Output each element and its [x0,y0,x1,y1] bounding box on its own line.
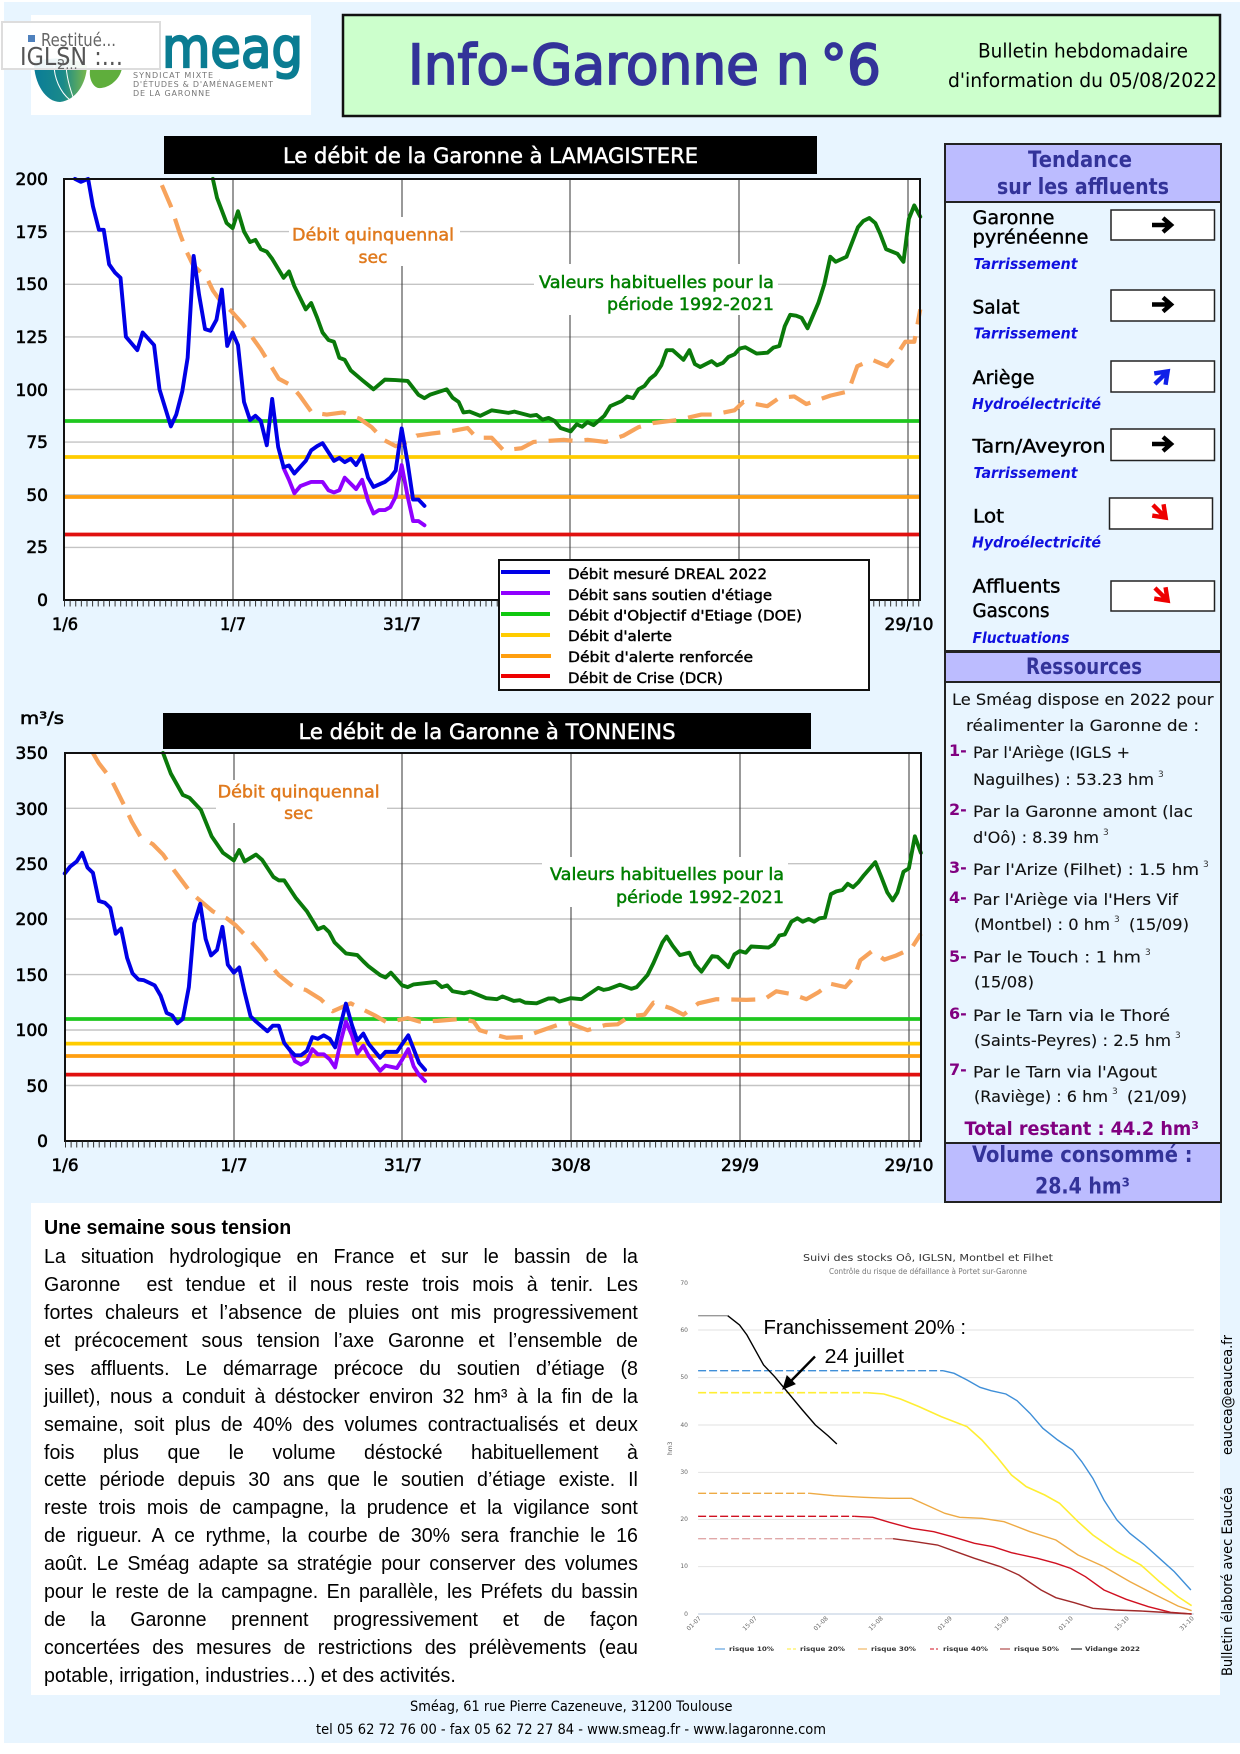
article text: ses affluents. Le démarrage précoce du soutien d’étiage (8 [44,1358,638,1380]
chart legend: risque 40% [943,1646,988,1653]
item 1: Naguilhes) : 53.23 hm [973,770,1154,789]
article text [44,1216,638,1687]
article text: de rigueur. A ce rythme, la courbe de 30% sera franchie le 16 [44,1525,638,1547]
annotation: habitual values: période 1992-2021 [607,295,774,315]
icon: arrow down-right [1147,499,1171,523]
item 5 [949,947,1151,992]
intro text: réalimenter la Garonne de : [966,716,1199,735]
y axis labels: 150 [16,966,48,986]
logo subtitle [133,71,273,98]
y axis labels: 25 [26,538,48,558]
article text: potable, irrigation, industries…) et des activités. [44,1665,456,1687]
risk 10% curve [698,1371,1191,1590]
callout: threshold crossing [764,1317,966,1389]
bulletin date [948,40,1217,92]
chart subtitle: Contrôle du risque de défaillance à Portet sur-Garonne [829,1267,1027,1276]
panel: tendance sur les affluents [945,144,1221,651]
row: Garonne pyrénéenne [972,207,1214,273]
row: Lot: Hydroélectricité [972,534,1101,552]
volume consommé: Volume consommé : [972,1143,1192,1168]
row: Tarn/Aveyron: Tarn/Aveyron [971,436,1106,458]
chart title: Lamagistere [164,136,817,174]
annotation: quinquennal [218,782,380,824]
article text: cette période depuis 30 ans que le soutien d’étiage existe. Il [44,1469,638,1491]
total restant: Total restant : 44.2 hm³ [964,1118,1199,1140]
item 2 [949,800,1193,847]
item 6: 3 [1175,1031,1181,1041]
y axis labels: 200 [16,170,48,190]
item 7: 7- [949,1060,967,1079]
article text: reste trois mois de campagne, la prudence et la vigilance sont [44,1497,638,1519]
item 5: 3 [1145,948,1151,958]
logo subtitle: D'ÉTUDES & D'AMÉNAGEMENT [133,78,273,89]
item 6: Par le Tarn via le Thoré [973,1006,1170,1025]
chart legend [715,1646,1140,1653]
x axis labels: 01-10 [1057,1615,1075,1632]
y axis labels: 350 [16,744,48,764]
x axis labels: 15-07 [741,1615,759,1632]
x axis labels: 1/6 [52,1156,78,1176]
series curves [65,753,921,1081]
y axis labels: 75 [26,433,48,453]
ressources heading: Ressources [1026,655,1142,680]
row: Tarn/Aveyron [971,429,1214,482]
x axis labels: 29/9 [721,1156,759,1176]
icon: teal leaf blob [34,59,87,102]
callout: threshold crossing: 24 juillet [824,1346,904,1368]
chart legend: risque 50% [1014,1646,1059,1653]
panel heading: Tendance [1028,148,1132,173]
row: Affluents Gascons [972,576,1214,647]
x axis labels: 31-10 [1178,1615,1196,1632]
y axis labels: 50 [680,1374,688,1381]
callout: threshold crossing: Franchissement 20% : [764,1317,966,1339]
annotation: habitual values: Valeurs habituelles pour la [539,273,774,293]
side credit text: Bulletin élaboré avec Eaucéa [1220,1487,1236,1676]
item 4: (15/09) [1129,915,1189,934]
item 2: d'Oô) : 8.39 hm [973,828,1099,847]
x axis labels: 15-10 [1113,1615,1131,1632]
chart title: Suivi des stocks Oô, IGLSN, Montbel et Filhet [803,1252,1053,1264]
y axis labels: 10 [680,1563,688,1570]
chart title: Tonneins: Le débit de la Garonne à TONNEINS [298,720,676,744]
x axis labels: 15-08 [867,1615,885,1632]
y axis labels [16,170,48,611]
x axis labels: 15-09 [993,1615,1011,1632]
panel heading [945,144,1221,202]
y axis labels: 50 [26,1077,48,1097]
article text: juillet), nous a conduit à déstocker environ 32 hm³ à la fin de la [44,1386,638,1408]
row: Affluents Gascons: Gascons [972,600,1050,622]
chart legend: risque 30% [871,1646,916,1653]
y axis labels: 30 [680,1469,688,1476]
item 7: Par le Tarn via l'Agout [973,1062,1157,1082]
habitual values curve [213,179,920,431]
chart legend: Débit mesuré DREAL 2022 [568,567,767,583]
label backgrounds [289,217,778,315]
logo wordmark: meag [162,16,303,80]
item 7 [949,1060,1187,1106]
x axis labels: 1/6 [52,615,78,635]
annotation: quinquennal: Débit quinquennal [218,782,380,802]
article text: Garonne est tendue et il nous reste trois mois à tenir. Les [44,1274,638,1296]
panel: article [31,1203,1220,1695]
item 6: 6- [949,1004,967,1023]
series curves [75,179,920,525]
y axis labels: 250 [16,855,48,875]
item 7: (21/09) [1127,1087,1187,1106]
item 3: 3 [1203,860,1209,870]
plot [698,1316,1194,1614]
item 4: 4- [949,888,967,907]
bulletin date: d'information du 05/08/2022 [948,69,1217,92]
threshold lines [65,1019,921,1075]
icon: green leaf blob [90,68,122,88]
risk 50% curve [698,1539,1192,1614]
volume consommé [945,1143,1221,1202]
y axis labels: 0 [684,1611,688,1618]
item 1 [949,741,1164,789]
chart legend: risque 10% [729,1646,774,1653]
chart title: Tonneins [163,713,811,749]
chart legend: Vidange 2022 [1085,1646,1140,1653]
row: Lot: Lot [973,506,1004,528]
article text: de la Garonne prennent progressivement et de façon [44,1609,638,1631]
annotation: habitual values [550,865,784,908]
y axis title: hm3 [667,1441,674,1455]
footer address: Sméag, 61 rue Pierre Cazeneuve, 31200 Toulouse [410,1699,732,1715]
row: Garonne pyrénéenne: Tarrissement [974,255,1078,273]
article text: semaine, soit plus de 40% des volumes contractualisés et deux [44,1414,638,1436]
x axis labels: 1/7 [220,615,246,635]
item 2: Par la Garonne amont (lac [973,802,1193,821]
chart legend: Débit d'Objectif d'Etiage (DOE) [568,608,802,624]
2022 drawdown curve [698,1316,837,1444]
icon: arrow up-right [1149,366,1173,390]
article text: fortes chaleurs et l’absence de pluies ont mis progressivement [44,1302,638,1324]
item 2: 2- [949,800,967,819]
item 1: Par l'Ariège (IGLS + [973,743,1130,762]
chart: Tonneins [16,744,934,1176]
side credit text [1220,1335,1236,1676]
article text: fois plus que le volume déstocké habituellement à [44,1442,638,1464]
item 6 [949,1004,1181,1050]
volume consommé: 28.4 hm³ [1035,1174,1130,1200]
x axis labels: 31/7 [384,1156,422,1176]
label backgrounds [216,780,788,907]
bulletin date: Bulletin hebdomadaire [978,40,1188,62]
icon: arrow right [1152,218,1171,232]
chart: Lamagistere [16,170,934,635]
quinquennal dry flow curve [93,753,921,1038]
chart legend: Débit d'alerte [568,629,672,645]
overlay label box: 2... [57,58,78,73]
panel heading: sur les affluents [997,175,1169,200]
y axis labels: 175 [16,223,48,243]
item 4: 3 [1114,915,1120,925]
logo subtitle: DE LA GARONNE [133,89,210,98]
y axis labels: 0 [37,591,48,611]
logo with overlay label [2,15,311,115]
overlay label box: Restitué... [41,30,116,51]
x axis labels: 01-09 [936,1615,954,1632]
x axis labels: 01-08 [812,1615,830,1632]
risk 20% curve [698,1393,1192,1606]
item 3: 3- [949,858,967,877]
x axis labels: 31/7 [383,615,421,635]
y axis labels: 150 [16,275,48,295]
y axis labels: 100 [16,381,48,401]
row: Affluents Gascons: Affluents [972,576,1060,598]
intro text [952,690,1214,735]
ressources heading [945,652,1221,682]
y axis labels: 50 [26,486,48,506]
article text: août. Le Sméag adapte sa stratégie pour conserver des volumes [44,1553,638,1575]
habitual values curve [163,753,921,1003]
y axis labels: 100 [16,1021,48,1041]
row: Ariège: Hydroélectricité [972,395,1101,413]
y axis labels: 125 [16,328,48,348]
row: Ariège [972,361,1214,413]
chart: stock follow-up [667,1252,1196,1653]
footer address: tel 05 62 72 76 00 - fax 05 62 72 27 84 - www.smeag.fr - www.lagaronne.com [316,1722,826,1738]
y axis labels: 300 [16,800,48,820]
item 5: (15/08) [974,972,1034,992]
x axis labels: 30/8 [551,1156,591,1176]
chart legend: Débit sans soutien d'étiage [568,588,772,604]
y axis labels [680,1280,688,1618]
x axis labels: 29/10 [884,615,934,635]
item 7: 3 [1112,1087,1118,1097]
header banner [343,15,1220,116]
logo subtitle: SYNDICAT MIXTE [133,71,213,80]
chart legend: Débit d'alerte renforcée [568,650,753,666]
annotation: quinquennal: Débit quinquennal [292,226,454,246]
article text: La situation hydrologique en France et sur le bassin de la [44,1246,638,1268]
threshold lines [64,421,920,534]
title: Info-Garonne n °6 [408,33,881,97]
x axis labels: 29/10 [884,1156,934,1176]
item 5: 5- [949,947,967,966]
chart legend [499,560,869,690]
item 6: (Saints-Peyres) : 2.5 hm [974,1031,1171,1050]
icon: arrow right [1152,437,1171,451]
x axis labels: 1/7 [220,1156,248,1176]
annotation: habitual values: période 1992-2021 [616,888,784,908]
icon: arrow right [1152,298,1171,312]
measured flow curve [65,853,425,1070]
measured flow curve [75,179,424,506]
row: Ariège: Ariège [972,367,1034,389]
quinquennal dry flow curve [162,185,920,450]
annotation: habitual values: Valeurs habituelles pour la [550,865,784,885]
item 2: 3 [1103,828,1109,838]
y axis labels: 0 [37,1132,48,1152]
x axis labels [685,1615,1196,1632]
item 7: (Raviège) : 6 hm [974,1087,1108,1106]
arrow: to crossing point [783,1356,815,1389]
risk 30% curve [698,1493,1192,1611]
row: Garonne pyrénéenne: Garonne [972,207,1054,229]
intro text: Le Sméag dispose en 2022 pour [952,690,1214,709]
footer address [316,1699,826,1738]
y axis labels [16,744,48,1152]
row: Lot [972,498,1212,552]
item 5: Par le Touch : 1 hm [973,948,1141,966]
item 4: (Montbel) : 0 hm [974,915,1110,934]
x axis labels [52,1156,934,1176]
y axis labels: 20 [680,1516,688,1523]
item 1: 1- [949,741,967,760]
annotation: quinquennal: sec [284,804,313,824]
chart legend: Débit de Crise (DCR) [568,671,723,687]
annotation: quinquennal [292,226,454,268]
item 1: 3 [1158,770,1164,780]
overlay label box: IGLSN :... [20,42,123,71]
item 4: Par l'Ariège via l'Hers Vif [973,890,1178,909]
unit label: m³/s [20,709,64,729]
chart title: Lamagistere: Le débit de la Garonne à LAMAGISTERE [283,144,698,168]
y axis labels: 200 [16,910,48,930]
item 3: Par l'Arize (Filhet) : 1.5 hm [973,860,1199,879]
row: Salat [972,290,1214,342]
flow without support curve [290,1022,425,1081]
article text: concertées des mesures de restrictions des prélèvements (eau [44,1637,638,1659]
y axis labels: 70 [680,1280,688,1287]
risk 40% curve [698,1516,1192,1614]
chart legend: risque 20% [800,1646,845,1653]
overlay label box [2,22,160,73]
x axis labels [52,615,934,635]
icon: arrow down-right [1149,582,1173,606]
row: Tarn/Aveyron: Tarrissement [974,464,1078,482]
side credit text: eaucea@eaucea.fr [1220,1335,1236,1455]
item 4 [949,888,1189,934]
row: Salat: Salat [972,296,1020,318]
article text: Une semaine sous tension [44,1216,291,1238]
annotation: quinquennal: sec [358,248,388,268]
y axis labels: 40 [680,1422,688,1429]
annotation: habitual values [539,273,774,315]
flow without support curve [284,465,424,525]
row: Salat: Tarrissement [974,324,1078,342]
article text: et précocement sous tension l’axe Garonne et l’ensemble de [44,1330,638,1352]
row: Affluents Gascons: Fluctuations [972,629,1070,647]
y axis labels: 60 [680,1327,688,1334]
panel: ressources [945,651,1221,1202]
x axis labels: 01-07 [685,1615,703,1632]
article text: pour le reste de la campagne. En parallèle, les Préfets du bassin [44,1581,638,1603]
row: Garonne pyrénéenne: pyrénéenne [972,226,1088,248]
